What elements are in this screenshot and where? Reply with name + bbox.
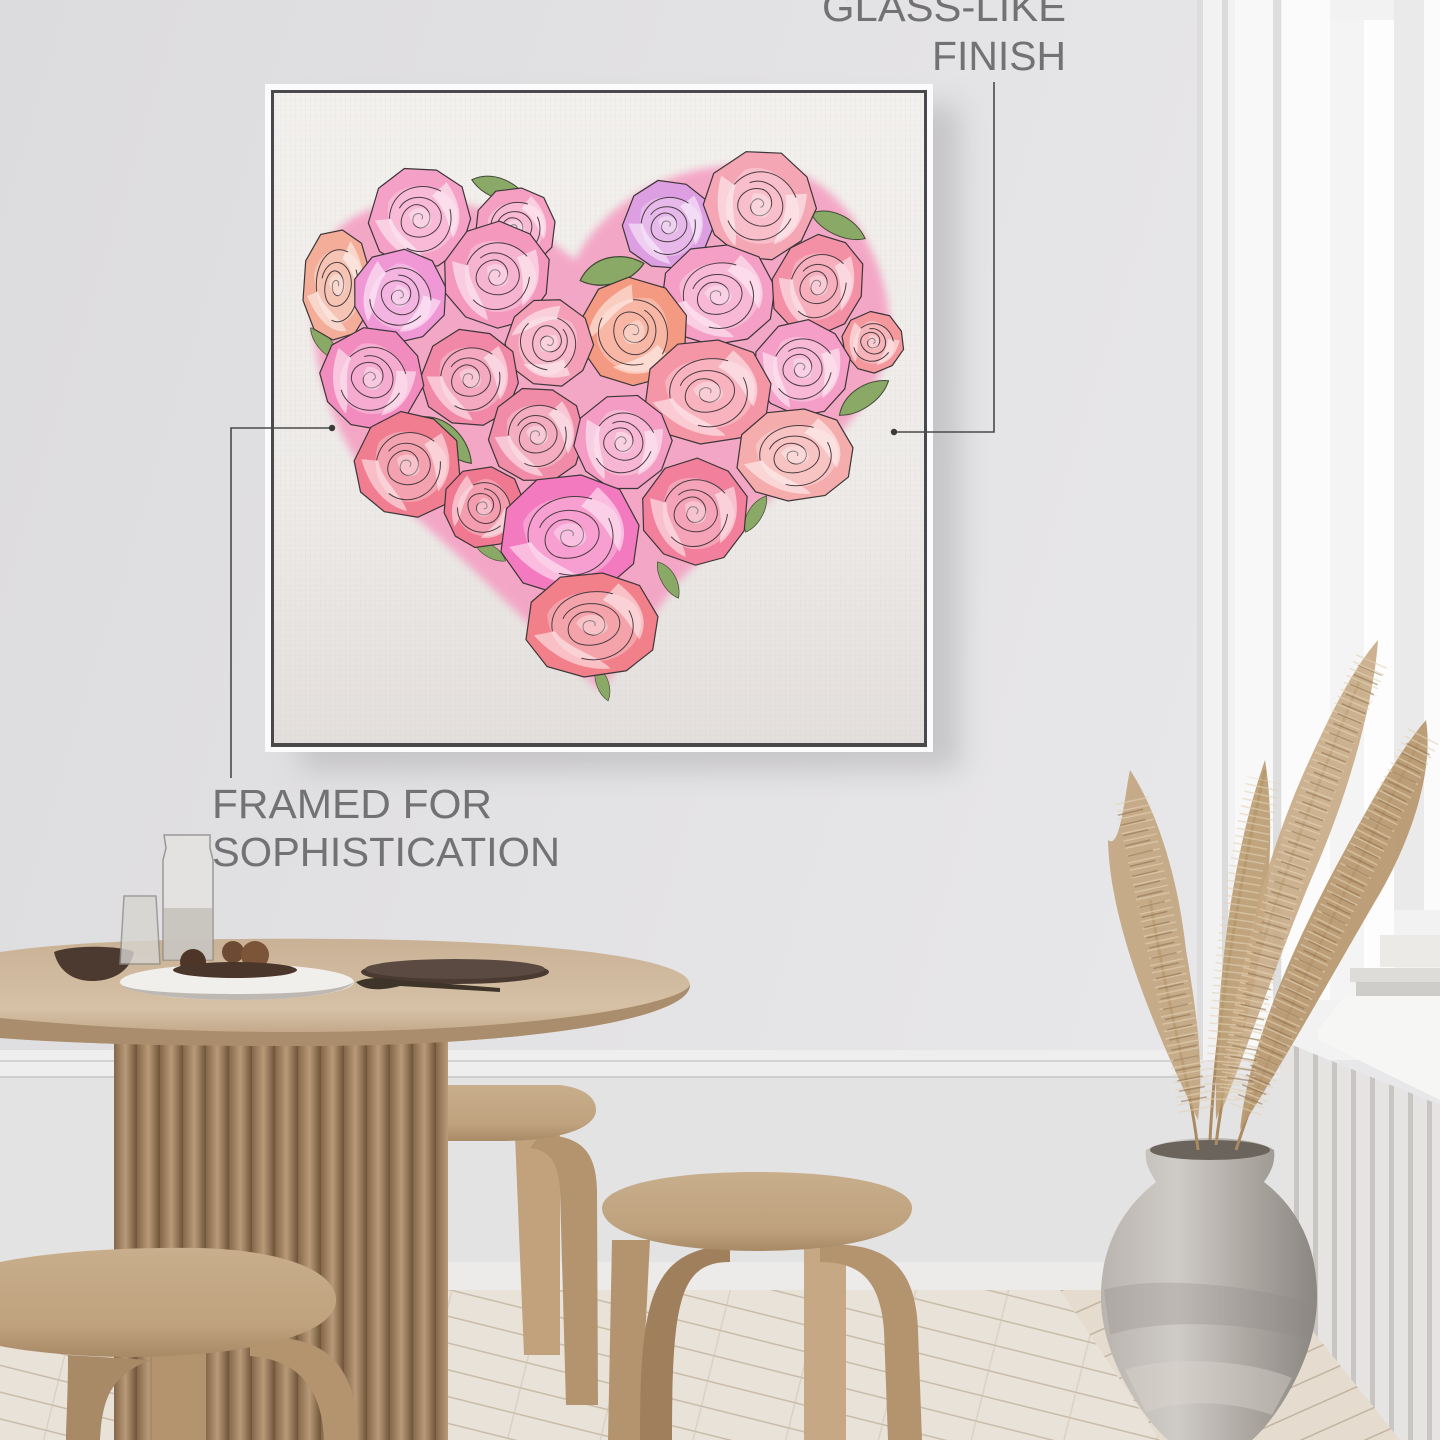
dark bowl — [54, 947, 134, 981]
callout: framed for sophistication: SOPHISTICATION — [212, 829, 560, 875]
callout: glass-like finish: FINISH — [932, 33, 1066, 79]
callout: glass-like finish — [822, 0, 1066, 435]
pampas grass — [1108, 640, 1428, 1150]
ceramic vase — [1101, 1138, 1317, 1440]
left foreground stool — [0, 1248, 358, 1440]
callout: framed for sophistication — [212, 425, 560, 875]
frame drop shadow — [300, 105, 960, 770]
plume texture — [1132, 660, 1424, 1110]
plume left — [1108, 770, 1200, 1120]
stack of books on sill — [1350, 935, 1440, 996]
callout leader line — [231, 428, 332, 778]
wooden floor — [0, 1290, 1400, 1440]
marble plate with nuts — [120, 941, 354, 1000]
spoon — [356, 978, 500, 992]
plume middle — [1222, 640, 1378, 1110]
skirting board — [0, 1262, 1280, 1292]
front stool — [602, 1172, 922, 1440]
canvas — [274, 93, 924, 743]
plume back — [1216, 760, 1270, 1120]
framed artwork — [265, 84, 933, 752]
plume right — [1240, 720, 1428, 1130]
callout leader line — [894, 82, 994, 432]
roses — [302, 129, 914, 677]
round table top — [0, 939, 690, 1046]
glass bottle — [163, 835, 213, 960]
heart of roses — [302, 129, 914, 703]
stems — [1150, 680, 1420, 1150]
dark wooden plate — [361, 959, 549, 984]
watercolour wash behind the heart — [313, 165, 890, 690]
radiator — [1280, 1040, 1440, 1440]
table pedestal — [114, 1036, 448, 1440]
callout label: FRAMED FOR — [212, 781, 492, 827]
leaves — [306, 169, 894, 703]
white outer frame — [265, 84, 933, 752]
window sill — [1318, 996, 1440, 1100]
back stool — [448, 1085, 598, 1405]
dark inner frame line — [271, 90, 927, 747]
lower wall panel — [0, 1078, 1280, 1264]
drinking glass — [120, 896, 160, 964]
window frame and trim — [1197, 0, 1440, 1060]
chair rail moulding — [0, 1050, 1180, 1078]
